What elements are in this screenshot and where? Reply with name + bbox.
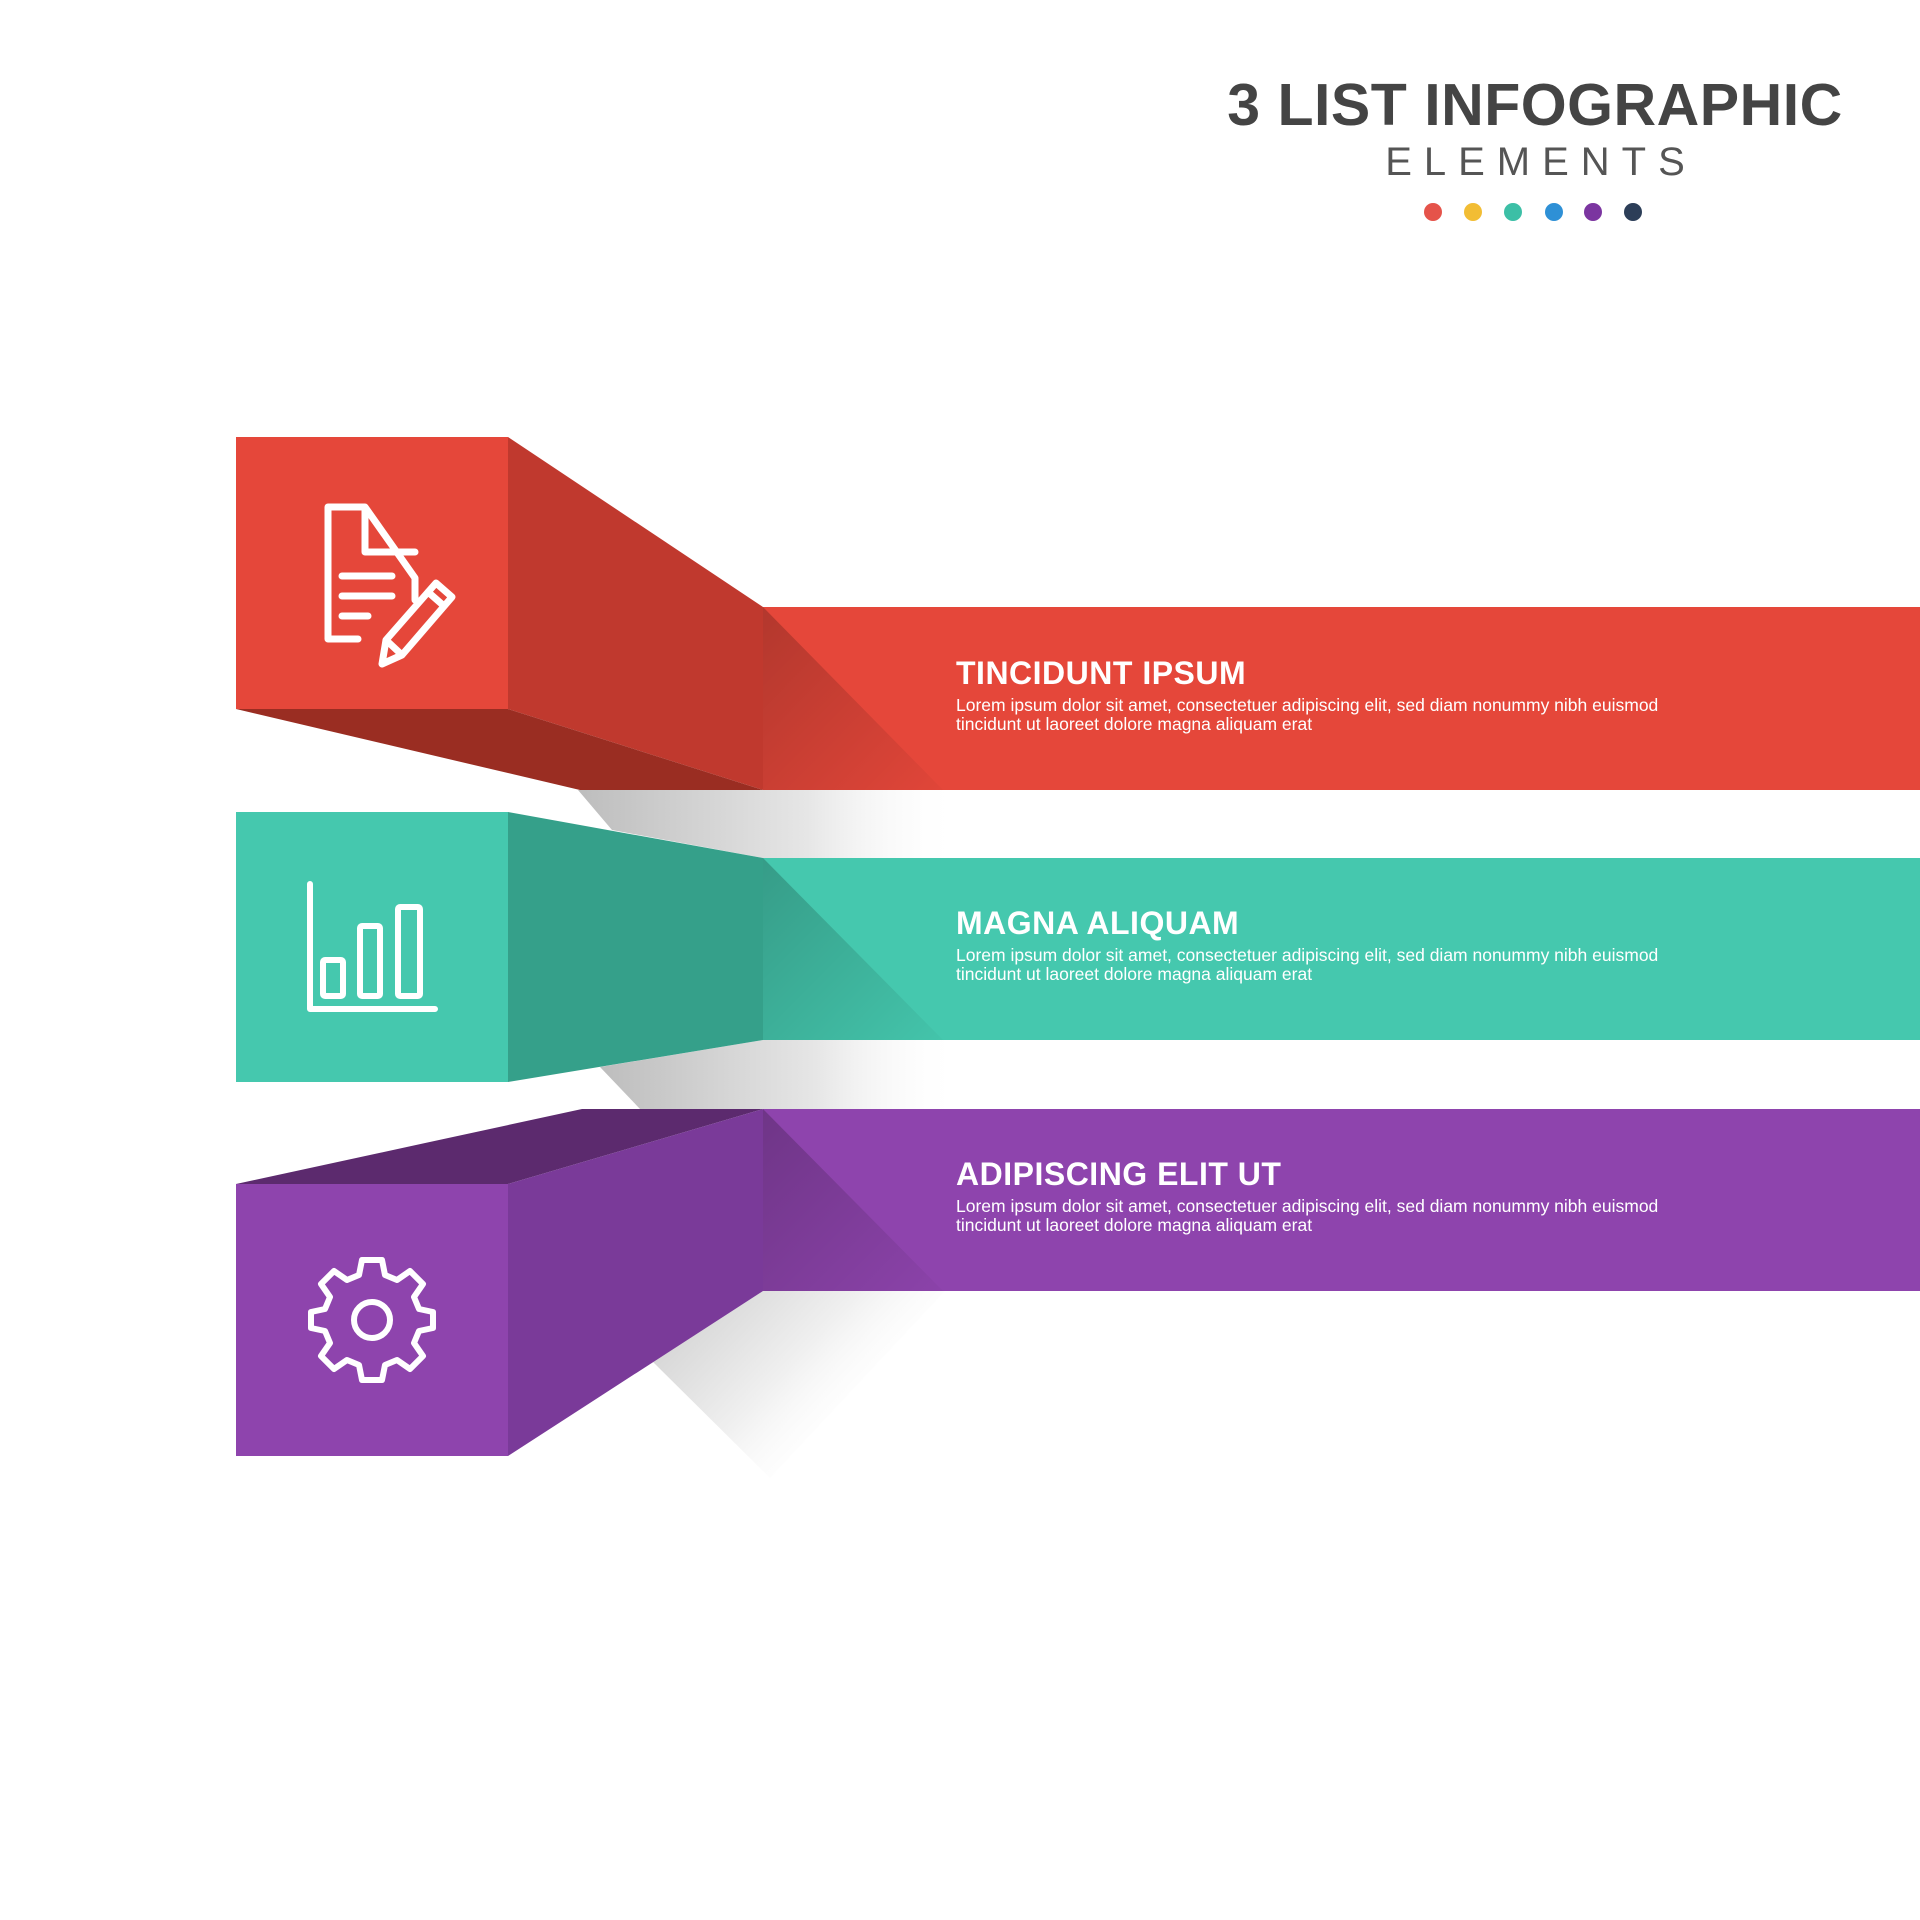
text: item 2: Lorem ipsum dolor sit amet, consectetuer adipiscing elit, sed diam nonummy nibh euismod xyxy=(956,945,1658,965)
text: item 1: tincidunt ut laoreet dolore magna aliquam erat xyxy=(956,714,1312,734)
text: item 2: tincidunt ut laoreet dolore magna aliquam erat xyxy=(956,964,1312,984)
icon: document with pencil xyxy=(328,507,452,664)
text: item 2: MAGNA ALIQUAM xyxy=(956,905,1239,941)
text: item 3 xyxy=(956,1156,1658,1234)
title: 3 LIST INFOGRAPHIC xyxy=(1227,72,1843,138)
title: ELEMENTS xyxy=(1385,140,1697,184)
shadow: purple xyxy=(653,1291,945,1478)
item 3: purple block xyxy=(236,1109,1920,1456)
title xyxy=(1227,72,1843,184)
shadow: red xyxy=(578,790,960,858)
text: item 1: TINCIDUNT IPSUM xyxy=(956,655,1246,691)
icon: bar chart xyxy=(310,884,435,1009)
icon: gear xyxy=(311,1260,433,1380)
item 1: red block xyxy=(236,437,1920,790)
text: item 2 xyxy=(956,905,1658,984)
text: item 3: Lorem ipsum dolor sit amet, consectetuer adipiscing elit, sed diam nonummy nibh euismod xyxy=(956,1196,1658,1216)
text: item 1: Lorem ipsum dolor sit amet, consectetuer adipiscing elit, sed diam nonummy nibh euismod xyxy=(956,695,1658,715)
text: item 3: ADIPISCING ELIT UT xyxy=(956,1156,1281,1192)
text: item 3: tincidunt ut laoreet dolore magna aliquam erat xyxy=(956,1214,1312,1234)
color dots xyxy=(1424,203,1642,221)
text: item 1 xyxy=(956,655,1658,734)
item 2: teal block xyxy=(236,812,1920,1082)
shadow: teal xyxy=(600,1040,960,1109)
